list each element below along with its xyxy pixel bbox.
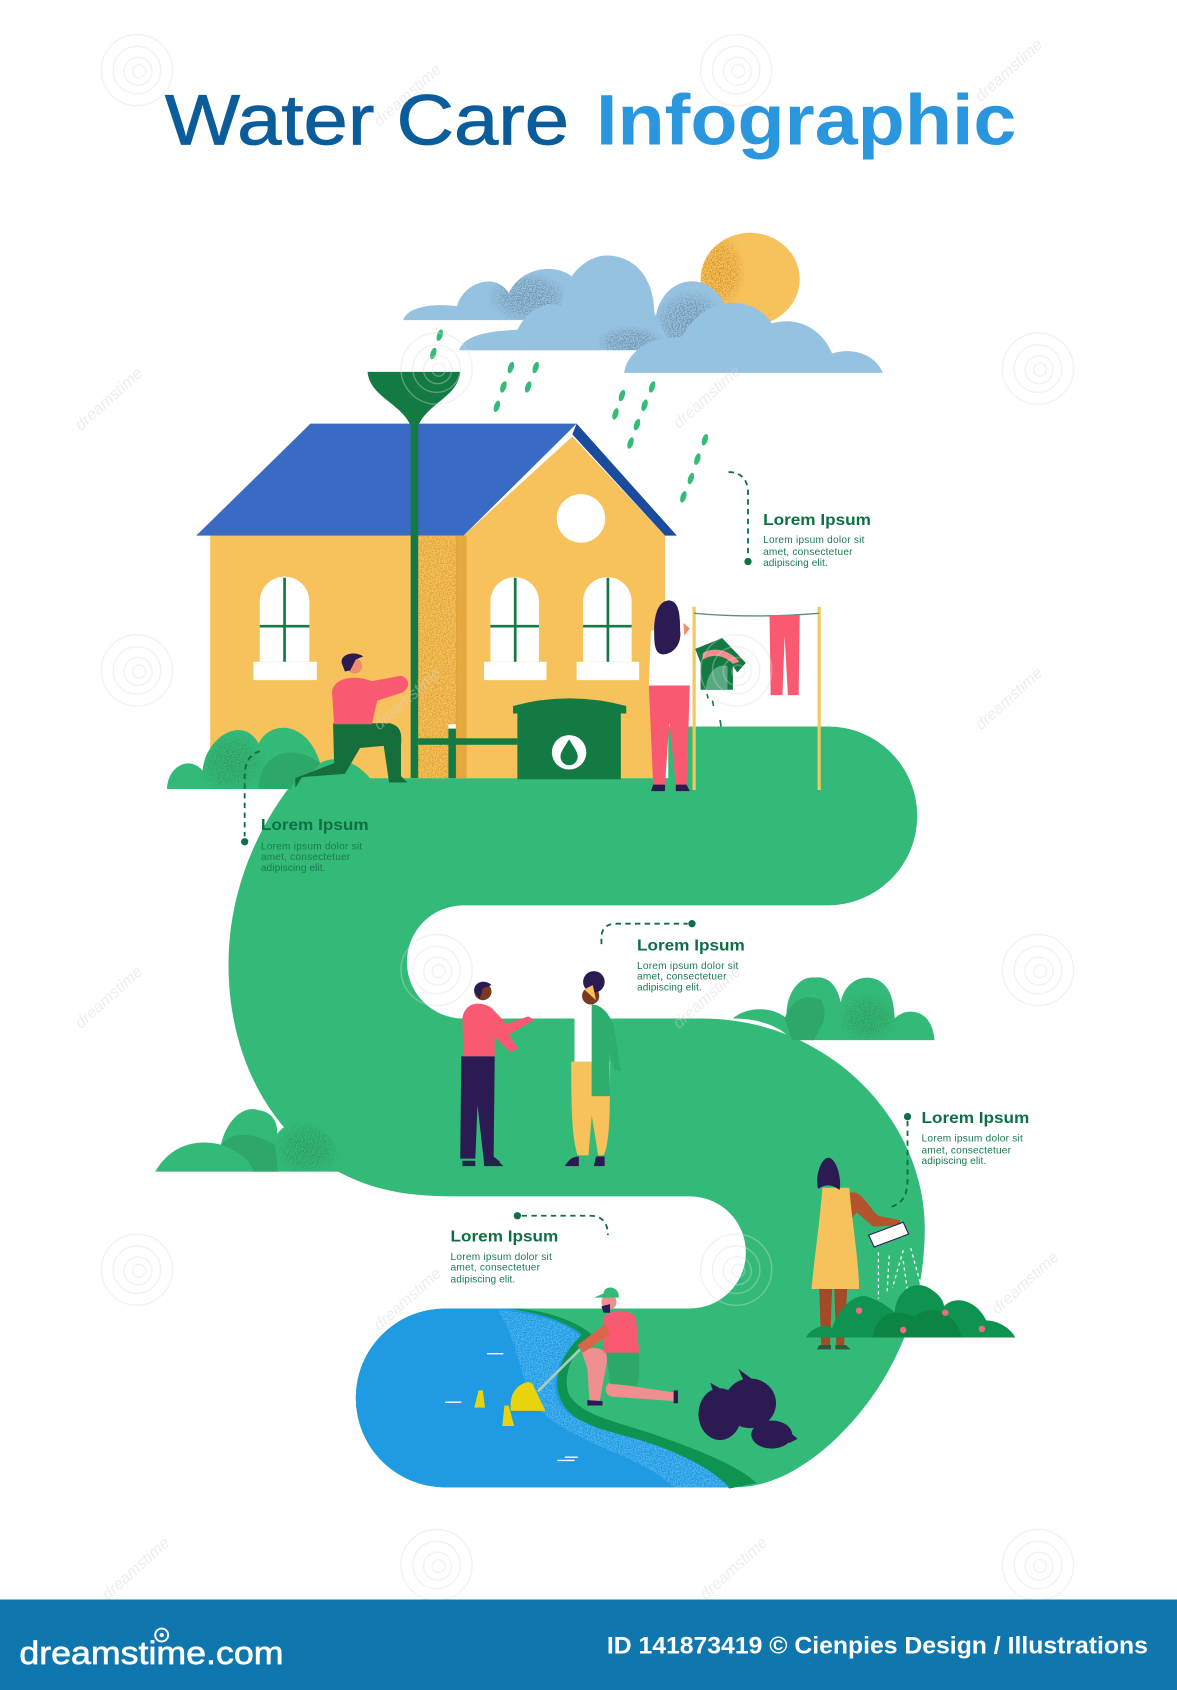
head bbox=[342, 653, 363, 674]
round window bbox=[557, 494, 605, 543]
callout: left bbox=[241, 751, 369, 874]
callout: right: amet, consectetuer bbox=[922, 1145, 1012, 1156]
woman hanging clothes bbox=[649, 600, 691, 791]
callout: center: Lorem Ipsum bbox=[637, 938, 745, 955]
title: Water Care bbox=[165, 81, 569, 160]
head bbox=[594, 1287, 619, 1313]
floating rubbish bbox=[474, 1382, 545, 1426]
callout: top right bbox=[729, 472, 871, 569]
title: Infographic bbox=[596, 81, 1016, 160]
callout: center: amet, consectetuer bbox=[637, 972, 727, 983]
white top bbox=[649, 631, 691, 685]
green shirt bbox=[695, 638, 746, 690]
callout: left: amet, consectetuer bbox=[261, 852, 351, 863]
ripples bbox=[445, 1354, 578, 1460]
far leg bbox=[606, 1383, 675, 1401]
watermark overlay: dreamstime bbox=[71, 962, 146, 1032]
legs bbox=[295, 723, 407, 788]
water tank bbox=[513, 698, 626, 779]
watermark overlay: dreamstime bbox=[98, 1534, 173, 1604]
title bbox=[165, 81, 1016, 160]
lake bbox=[356, 1308, 757, 1488]
right window bbox=[577, 577, 639, 680]
drips bbox=[707, 694, 721, 726]
callout: right bbox=[889, 1110, 1029, 1207]
connector bbox=[601, 920, 696, 944]
near leg bbox=[582, 1348, 608, 1403]
watermark overlay: dreamstime bbox=[697, 1534, 771, 1604]
callout: bottom: Lorem Ipsum bbox=[451, 1229, 558, 1246]
man bbox=[460, 982, 535, 1166]
callout: top right: Lorem ipsum dolor sit bbox=[763, 535, 865, 546]
pants bbox=[649, 685, 690, 785]
bush middle right bbox=[733, 977, 934, 1044]
watermark overlay: dreamstime bbox=[370, 60, 445, 130]
water bbox=[356, 1308, 730, 1487]
callout: center: adipiscing elit. bbox=[637, 983, 702, 994]
middle window bbox=[484, 577, 546, 680]
gable roof edge bbox=[572, 424, 677, 536]
callout: bottom: adipiscing elit. bbox=[451, 1275, 515, 1286]
callout: left: Lorem Ipsum bbox=[261, 817, 369, 834]
callout: bottom: amet, consectetuer bbox=[451, 1263, 541, 1274]
watermark overlay: dreamstime bbox=[971, 664, 1046, 734]
wall shadow bbox=[418, 536, 467, 778]
watermark overlay: dreamstime bbox=[670, 362, 744, 432]
house roof bbox=[196, 424, 577, 536]
watermark overlay: dreamstime bbox=[370, 664, 445, 734]
woman bbox=[555, 971, 621, 1166]
callout: top right: Lorem Ipsum bbox=[763, 512, 871, 529]
callout: bottom bbox=[451, 1212, 608, 1286]
connector bbox=[241, 751, 260, 845]
callout: left: adipiscing elit. bbox=[261, 863, 326, 874]
house walls bbox=[210, 437, 665, 778]
green S-shaped path bbox=[229, 726, 925, 1487]
callout: right: Lorem Ipsum bbox=[922, 1110, 1029, 1127]
watermark overlay bbox=[71, 34, 1074, 1604]
drop icon bbox=[552, 735, 586, 770]
callout: right: adipiscing elit. bbox=[922, 1156, 986, 1167]
left window bbox=[253, 577, 317, 680]
stick bbox=[538, 1349, 580, 1391]
connector bbox=[889, 1113, 911, 1207]
callout: left: Lorem ipsum dolor sit bbox=[261, 841, 362, 852]
dark bush with flowers bbox=[806, 1285, 1015, 1338]
water bbox=[878, 1248, 922, 1299]
feet bbox=[651, 785, 690, 791]
rain drops bbox=[429, 329, 709, 503]
shirt bbox=[604, 1311, 639, 1353]
callout: right: Lorem ipsum dolor sit bbox=[922, 1133, 1023, 1144]
connector bbox=[514, 1212, 608, 1235]
two people talking bbox=[460, 971, 621, 1166]
callout: top right: adipiscing elit. bbox=[763, 558, 828, 569]
clothesline bbox=[694, 607, 819, 790]
shorts bbox=[606, 1349, 639, 1386]
footer bar bbox=[0, 1599, 1177, 1690]
callout: center bbox=[601, 920, 745, 994]
watermark overlay: dreamstime bbox=[71, 364, 146, 434]
sun bbox=[694, 233, 800, 325]
hair bbox=[654, 600, 680, 654]
callout: bottom: Lorem ipsum dolor sit bbox=[451, 1252, 552, 1263]
watermark overlay: dreamstime bbox=[670, 962, 744, 1032]
footer logo: dreamstime.com bbox=[19, 1635, 283, 1671]
callout: top right: amet, consectetuer bbox=[763, 547, 853, 558]
connector bbox=[729, 472, 752, 565]
watermark overlay: dreamstime bbox=[971, 36, 1046, 105]
clouds bbox=[403, 255, 883, 373]
rubbish bags bbox=[698, 1369, 798, 1449]
shore band bbox=[509, 1308, 757, 1488]
pink trousers bbox=[770, 615, 800, 695]
watermark overlay: dreamstime bbox=[370, 1264, 445, 1334]
watering woman bbox=[812, 1158, 922, 1349]
kneeling man fixing pipe bbox=[295, 653, 408, 788]
sweater bbox=[332, 676, 408, 724]
footer credit: ID 141873419 © Cienpies Design / Illustrations bbox=[607, 1633, 1148, 1659]
callout: center: Lorem ipsum dolor sit bbox=[637, 961, 738, 972]
watering can bbox=[869, 1222, 909, 1247]
bush lower left bbox=[155, 1109, 339, 1172]
water highlight bbox=[498, 1311, 729, 1487]
bush top left bbox=[167, 728, 370, 789]
rain collector funnel and pipe bbox=[368, 372, 517, 778]
watermark overlay: dreamstime bbox=[988, 1248, 1062, 1318]
man cleaning lake bbox=[538, 1287, 678, 1405]
house bbox=[196, 424, 677, 778]
